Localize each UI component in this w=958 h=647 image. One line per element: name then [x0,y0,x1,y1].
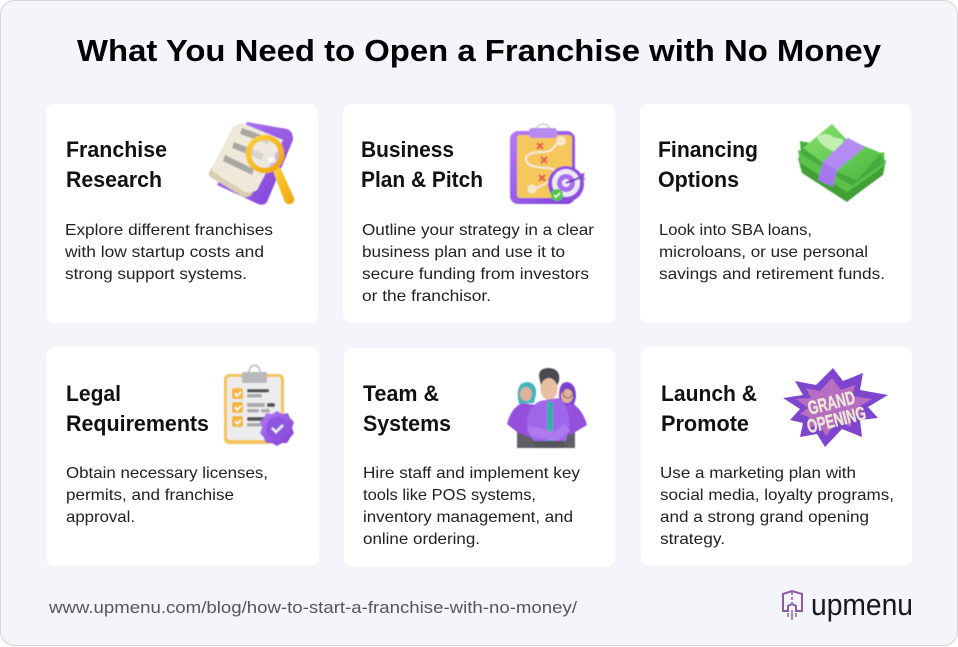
text: business plan and pitch: business plan and use it to [362,244,565,261]
heading: legal requirements [66,381,209,436]
text: team and systems: inventory management, and [363,509,573,526]
text: legal requirements: approval. [66,509,135,526]
source url: www.upmenu.com/blog/how-to-start-a-franchise-with-no-money/ [48,598,577,617]
heading: franchise research: Research [66,167,162,192]
heading: legal requirements: Legal [66,381,121,406]
text: launch and promote: social media, loyalty programs, [660,487,894,504]
text: team and systems: Hire staff and implement key [363,465,580,482]
text: franchise research: Explore different franchises [65,222,273,239]
panel: team and systems [344,348,615,567]
icon: clipboard with target [510,124,586,204]
heading: legal requirements: Requirements [66,411,209,436]
heading: launch and promote [661,381,757,436]
panel: launch and promote [641,347,912,566]
text: business plan and pitch: secure funding from investors [362,266,589,283]
text: legal requirements: permits, and franchise [66,487,234,504]
icon: grand opening starburst [783,368,888,447]
heading: franchise research: Franchise [66,137,167,162]
icon: stack of banknotes [798,124,886,202]
text: financing options: savings and retirement funds. [659,266,885,283]
logo: upmenu: upmenu [811,587,913,622]
heading: launch and promote: Promote [661,411,749,436]
text: legal requirements: Obtain necessary licenses, [66,465,268,482]
text: franchise research: strong support systems. [65,266,247,283]
icon: grand opening starburst: GRAND [806,388,857,420]
text: team and systems [363,465,580,548]
heading: business plan and pitch [361,137,483,192]
text: financing options: microloans, or use personal [659,244,868,261]
heading: franchise research [66,137,167,192]
heading: business plan and pitch: Business [361,137,454,162]
heading: financing options: Financing [658,137,758,162]
text: business plan and pitch: Outline your strategy in a clear [362,222,595,239]
heading: financing options [658,137,758,192]
heading: launch and promote: Launch & [661,381,757,406]
icon: compliance checklist [224,365,294,446]
text: team and systems: tools like POS systems, [363,487,536,504]
heading: team and systems: Systems [363,411,451,436]
text: financing options: Look into SBA loans, [659,222,812,239]
heading: business plan and pitch: Plan & Pitch [361,167,483,192]
text: launch and promote: Use a marketing plan with [660,465,856,482]
text: franchise research: with low startup costs and [64,244,264,261]
text: business plan and pitch: or the franchisor. [362,288,491,305]
panel: legal requirements [46,347,319,566]
icon: three team members [507,368,587,448]
text: launch and promote: strategy. [660,531,725,548]
text: launch and promote [660,465,894,548]
heading: financing options: Options [658,167,739,192]
text: legal requirements [66,465,268,526]
icon: grand opening starburst: OPENING [805,403,868,438]
heading: team and systems: Team & [363,381,439,406]
panel: franchise research [46,104,318,323]
icon: upmenu book mark [783,591,802,620]
panel: financing options [640,104,911,323]
heading: team and systems [363,381,451,436]
panel: business plan and pitch [343,104,615,323]
title: What You Need to Open a Franchise with No Money [77,33,882,68]
icon: magnifier over documents [209,122,294,205]
text: business plan and pitch [362,222,595,305]
text: franchise research [64,222,273,283]
text: team and systems: online ordering. [363,531,480,548]
text: launch and promote: and a strong grand opening [660,509,869,526]
text: financing options [659,222,885,283]
